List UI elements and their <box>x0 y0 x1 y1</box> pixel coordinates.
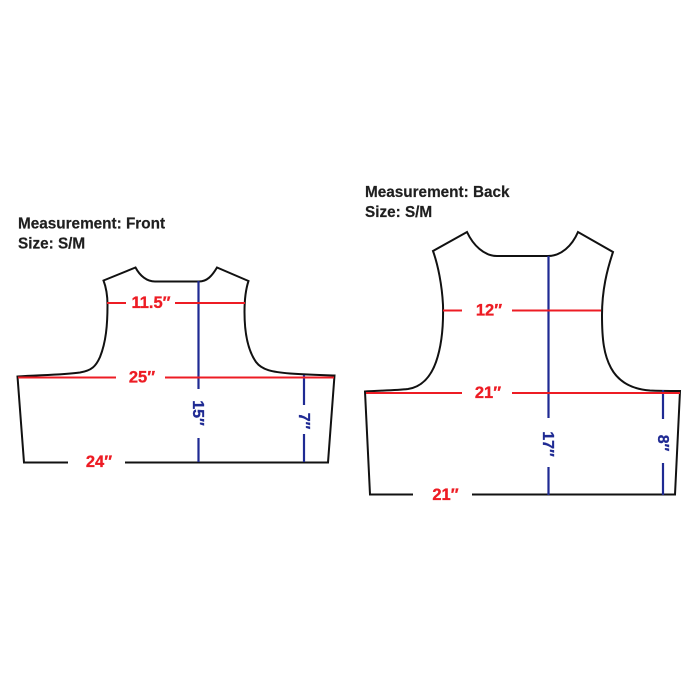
heading: front: Measurement: Front <box>18 216 165 232</box>
heading: back: Measurement: Back <box>365 184 510 201</box>
heading: front: Size: S/M <box>18 236 85 252</box>
heading: back <box>365 184 510 221</box>
front red labels: 25″ <box>129 368 155 386</box>
back vest outline <box>365 232 680 494</box>
back red labels: 21″ <box>432 486 459 504</box>
back blue labels <box>539 431 671 457</box>
panel: front measurement <box>18 216 334 471</box>
front red labels: 24″ <box>86 453 112 471</box>
heading: back: Size: S/M <box>365 204 432 221</box>
back blue vertical lines <box>548 256 663 495</box>
back red labels <box>432 302 502 504</box>
front blue vertical lines <box>198 281 304 462</box>
front red horizontal lines <box>18 303 334 378</box>
back blue labels: 8″ <box>654 435 671 452</box>
back red labels: 21″ <box>475 384 501 402</box>
front vest outline <box>18 268 334 462</box>
back blue labels: 17″ <box>539 431 556 457</box>
front red labels <box>86 294 171 471</box>
front red labels: 11.5″ <box>131 294 171 312</box>
back red horizontal lines <box>366 310 680 393</box>
panel: back measurement <box>365 184 680 504</box>
front blue labels: 15″ <box>189 400 206 426</box>
heading: front <box>18 216 165 252</box>
back red labels: 12″ <box>476 302 502 320</box>
front blue labels <box>189 400 312 430</box>
front blue labels: 7″ <box>295 413 312 430</box>
